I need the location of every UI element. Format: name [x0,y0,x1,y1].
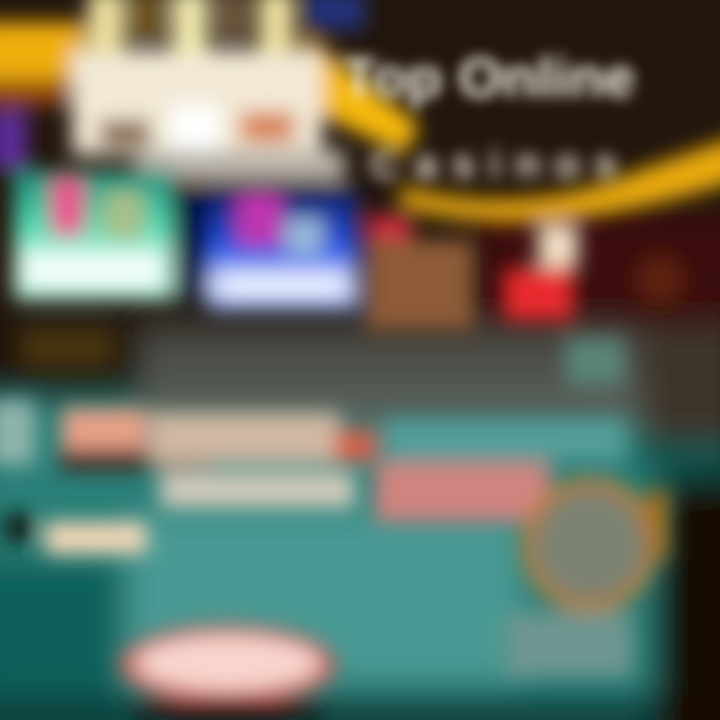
grey lower right [505,612,633,677]
mint card panel [14,170,174,300]
pink chips cluster [62,408,147,456]
purple left sliver [0,110,28,170]
small cream label left [45,522,147,554]
left brown band detail [20,325,115,370]
blue card panel [178,190,214,300]
gold ribbon left [0,22,85,82]
gold ribbon middle and right [300,30,420,155]
bottom pink oval [120,625,336,705]
roulette wheel [530,485,650,605]
teal tile right of grey band [565,338,625,386]
orange glow right [634,254,686,306]
title: Top Online [342,46,635,110]
brown box [366,240,474,330]
subtitle: Casinos [370,140,631,187]
white figures top [72,50,322,155]
top dark backdrop [0,0,720,320]
blue accent top [305,0,365,30]
red figure with white head [504,268,574,320]
lower teal table [0,395,670,720]
red dice [368,215,412,257]
pale teal band [0,400,35,465]
dark right edge [655,490,720,720]
grey middle band [140,325,650,425]
